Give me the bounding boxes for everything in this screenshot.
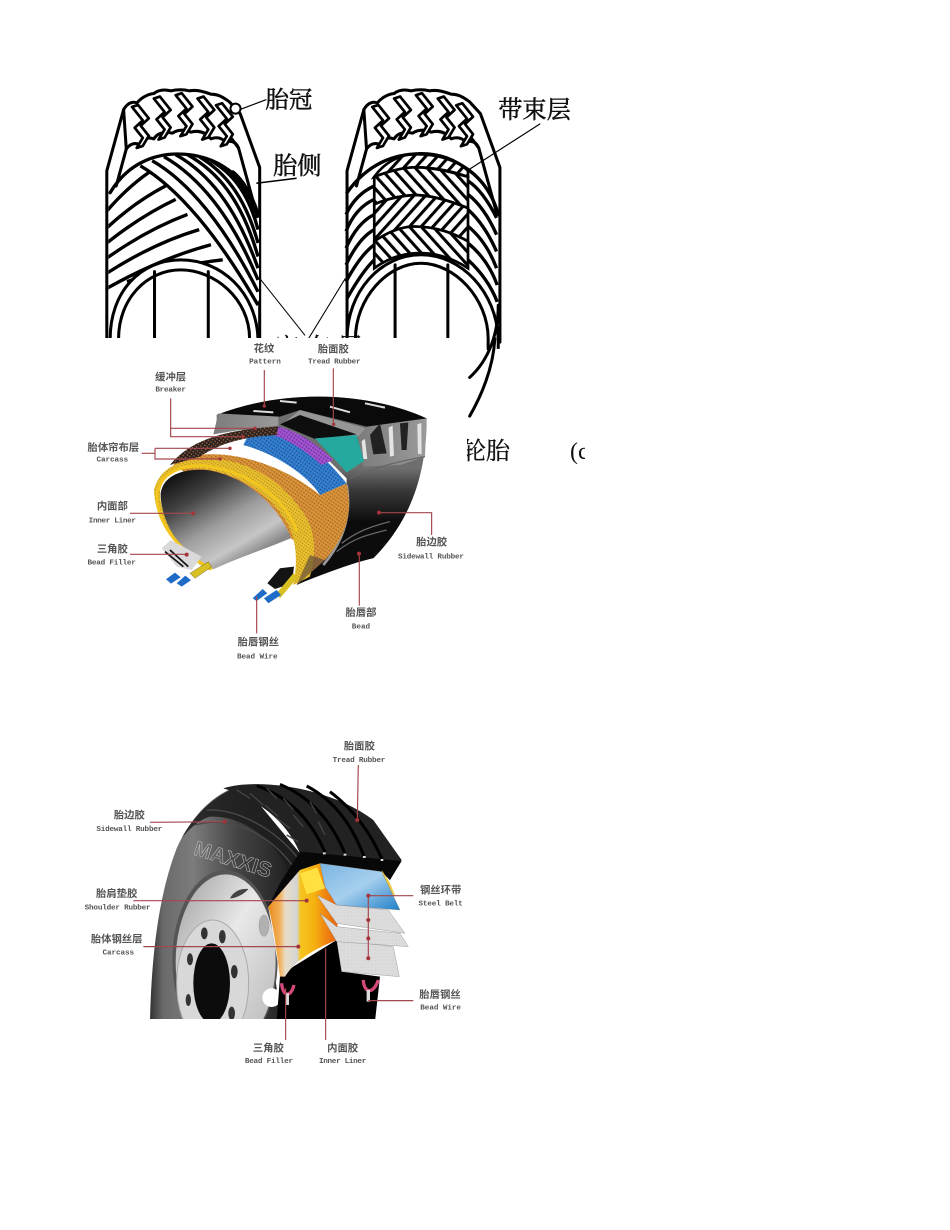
- label: sidewall rubber: Sidewall Rubber: [398, 553, 464, 561]
- label: steel belt: [366, 884, 463, 960]
- label: sidewall rubber: [377, 511, 464, 561]
- label: bead: Bead: [352, 624, 371, 632]
- label: inner liner: 内面胶: [327, 1041, 359, 1054]
- label: bead wire: 胎唇钢丝: [238, 635, 279, 648]
- wheel hub hole: [193, 943, 230, 1023]
- panel: tyre on wheel cutaway photo: [85, 740, 463, 1066]
- label: sidewall rubber: 胎边胶: [114, 809, 145, 822]
- label: tread rubber: Tread Rubber: [308, 358, 361, 366]
- label: inner liner: 内面部: [97, 500, 128, 513]
- label: bead wire: [368, 988, 461, 1012]
- label: bead wire: [237, 597, 279, 661]
- label: carcass: [88, 441, 232, 465]
- label: sidewall: 胎侧: [273, 153, 322, 180]
- label: bead filler: [245, 988, 294, 1066]
- label: sidewall rubber: [96, 809, 227, 834]
- ply bands between the belts: [374, 153, 468, 268]
- breaker band: dark: [170, 427, 278, 465]
- label: carcass: [91, 933, 300, 957]
- bead wire: [253, 567, 298, 603]
- casing band: yellow: [154, 458, 314, 585]
- label: breaker: Breaker: [155, 387, 186, 395]
- label: carcass: Carcass: [96, 457, 129, 465]
- labels and leaders: [87, 342, 464, 661]
- label: bead filler: 三角胶: [253, 1041, 284, 1054]
- label: breaker: [155, 370, 257, 438]
- label: carcass: Carcass: [102, 949, 135, 957]
- belted tyre drawing: [346, 90, 500, 416]
- ply band: blue: [243, 431, 347, 495]
- sidewall: [150, 785, 300, 1022]
- label: ply layer, partly hidden by photo: 帘布层: [275, 335, 370, 362]
- panel: line drawings of bias and belted tyres: [107, 87, 572, 416]
- label: bead: [345, 552, 376, 632]
- bead rings: [282, 980, 378, 1005]
- label: tread rubber: 胎面胶: [318, 343, 349, 356]
- label: sidewall: [256, 153, 322, 183]
- caption fragment: (c: (c: [570, 439, 589, 465]
- labels and leaders: [85, 740, 463, 1066]
- label: breaker: 缓冲层: [155, 370, 186, 383]
- steel belts: [317, 863, 408, 977]
- tyre and wheel: [150, 783, 408, 1019]
- label: inner liner: Inner Liner: [89, 518, 136, 526]
- label: sidewall rubber: Sidewall Rubber: [96, 826, 163, 834]
- label: inner liner: Inner Liner: [319, 1058, 367, 1066]
- tread rubber: teal: [315, 435, 364, 472]
- casing edge: bright yellow: [157, 466, 297, 569]
- label: carcass: 胎体钢丝层: [91, 933, 142, 946]
- bead filler: [162, 540, 212, 587]
- leader lines: plies: [260, 278, 345, 339]
- label: pattern: Pattern: [249, 358, 281, 366]
- bolt holes: [186, 927, 238, 1020]
- photo background mask: [104, 338, 468, 416]
- label: bead wire: 胎唇钢丝: [419, 988, 461, 1001]
- carcass: orange ply: [268, 863, 338, 977]
- label: steel belt: Steel Belt: [418, 900, 463, 908]
- shoulder shading: [182, 790, 300, 860]
- sidewall ridges: [195, 810, 297, 867]
- label: shoulder rubber: Shoulder Rubber: [85, 904, 151, 912]
- label: inner liner: [89, 500, 195, 526]
- label: carcass: 胎体帘布层: [88, 441, 139, 454]
- label: bead filler: [87, 543, 189, 567]
- label: bead filler: Bead Filler: [87, 559, 136, 567]
- carcass band: orange: [173, 454, 349, 585]
- label: steel belt: 钢丝环带: [420, 884, 461, 897]
- tyre body: [213, 397, 427, 585]
- black interior: [277, 940, 380, 1022]
- inner liner cavity: [161, 470, 291, 569]
- bead end mottling: [297, 555, 325, 585]
- label: bead wire: Bead Wire: [420, 1004, 461, 1012]
- wheel rim: [172, 871, 278, 1019]
- label: bead: 胎唇部: [345, 606, 376, 619]
- label: inner liner: [319, 948, 367, 1066]
- label: belt layer: [470, 97, 572, 169]
- label: bead wire: Bead Wire: [237, 653, 278, 661]
- breaker band: purple: [273, 427, 333, 465]
- panel: truck tyre cutaway photo: [87, 342, 464, 661]
- label: bead filler: Bead Filler: [245, 1058, 294, 1066]
- label: sidewall rubber: 胎边胶: [416, 535, 448, 548]
- caption fragment: tyre: 轮胎: [462, 438, 511, 465]
- tread: [223, 784, 402, 907]
- label: tread rubber: Tread Rubber: [333, 757, 386, 765]
- label: pattern: [249, 342, 281, 408]
- bias tyre drawing: [107, 90, 261, 349]
- ply bands: [154, 427, 349, 585]
- label: tread rubber: [308, 343, 361, 426]
- label: tread rubber: 胎面胶: [344, 740, 375, 753]
- label: bead filler: 三角胶: [97, 543, 128, 556]
- rim window: [230, 889, 248, 898]
- label: tread rubber: [333, 740, 386, 822]
- label: crown: [230, 87, 312, 114]
- label: shoulder rubber: [85, 887, 309, 912]
- yellow shoulder strip: [300, 868, 325, 894]
- tyre structure infographic: [84, 88, 585, 1063]
- label: shoulder rubber: 胎肩垫胶: [96, 887, 138, 900]
- label: pattern: 花纹: [254, 342, 275, 355]
- label: crown: 胎冠: [265, 87, 312, 114]
- label: belt layer: 带束层: [498, 97, 572, 124]
- brand text: MAXXIS: [191, 837, 274, 882]
